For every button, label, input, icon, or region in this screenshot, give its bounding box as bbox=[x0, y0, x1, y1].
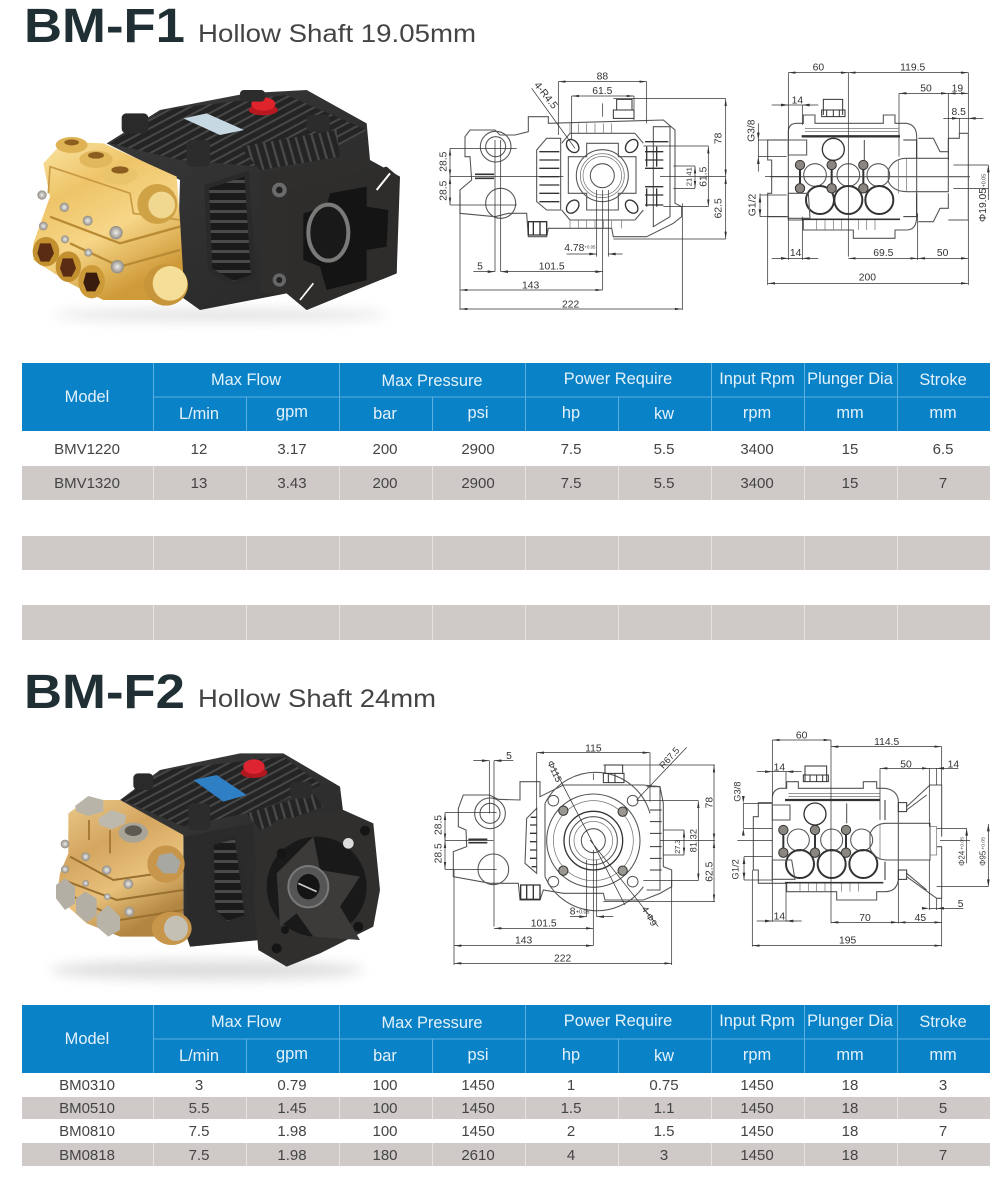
table rows: 1.5 bbox=[654, 1123, 674, 1140]
dimension lines and values: 5 bbox=[958, 899, 964, 910]
dimension lines and values: 62.5 bbox=[713, 198, 724, 218]
table rows: 5.5 bbox=[654, 441, 674, 458]
table rows: 7 bbox=[939, 475, 947, 492]
dimension lines and values: G1/2 bbox=[731, 859, 741, 879]
table rows: 18 bbox=[842, 1147, 858, 1164]
table rows: 5 bbox=[939, 1100, 947, 1117]
table header: Model bbox=[65, 388, 109, 406]
table rows: BM0818 bbox=[59, 1147, 115, 1164]
table header: mm bbox=[836, 404, 864, 422]
table rows: 3.17 bbox=[277, 441, 307, 458]
table: BM-F1 specifications bbox=[22, 363, 990, 640]
table rows: 1450 bbox=[740, 1077, 774, 1094]
table rows: 1.1 bbox=[654, 1100, 674, 1117]
dimension lines and values: 5 bbox=[506, 751, 512, 762]
dimension lines and values: 28.5 bbox=[439, 180, 450, 201]
table rows: 6.5 bbox=[933, 441, 953, 458]
table rows: 0.79 bbox=[277, 1077, 307, 1094]
table header: L/min bbox=[179, 405, 219, 423]
table rows: 1.5 bbox=[561, 1100, 581, 1117]
table header: Plunger Dia bbox=[807, 1012, 894, 1030]
dimension lines and values: +0.05 bbox=[981, 837, 987, 850]
dimension lines and values: 60 bbox=[813, 63, 824, 74]
table rows: 0.75 bbox=[649, 1077, 679, 1094]
drawing outline bbox=[453, 765, 672, 911]
dimension lines and values: R67.5 bbox=[657, 745, 681, 771]
dimension lines and values: 8 bbox=[570, 906, 576, 917]
dimension lines and values: 114.5 bbox=[874, 737, 899, 748]
table rows: 1 bbox=[567, 1077, 575, 1094]
dimension lines and values: 5 bbox=[477, 261, 483, 272]
table header: bar bbox=[373, 1047, 397, 1065]
dimension lines and values: Φ115 bbox=[545, 759, 564, 784]
dimension lines and values: 45 bbox=[915, 913, 926, 924]
table rows: 1450 bbox=[461, 1077, 495, 1094]
table rows: 200 bbox=[372, 441, 398, 458]
dimension lines and values: Φ95 bbox=[978, 850, 987, 866]
table rows: 200 bbox=[372, 475, 398, 492]
dimension lines and values: 61.5 bbox=[699, 166, 710, 187]
table rows: 1450 bbox=[740, 1123, 774, 1140]
table header: Max Pressure bbox=[381, 1014, 483, 1032]
dimension lines and values: 50 bbox=[920, 83, 932, 94]
table header: gpm bbox=[276, 1045, 308, 1063]
table header: L/min bbox=[179, 1047, 219, 1065]
table rows: 2900 bbox=[461, 475, 495, 492]
dimension lines and values: 70 bbox=[859, 913, 871, 924]
table rows: 7.5 bbox=[189, 1123, 209, 1140]
dimension lines and values bbox=[747, 63, 990, 285]
table header bbox=[22, 1005, 990, 1073]
icon: BM-F1 pump photo bbox=[33, 90, 400, 321]
table rows: 1450 bbox=[740, 1147, 774, 1164]
icon: BM-F2 pump photo bbox=[50, 753, 380, 980]
dimension lines and values: 60 bbox=[796, 730, 808, 741]
dimension lines and values: +0.05 bbox=[981, 174, 987, 187]
table rows: 1450 bbox=[461, 1100, 495, 1117]
dimension lines and values: G3/8 bbox=[747, 119, 758, 142]
title: BM-F1: BM-F1 bbox=[24, 0, 185, 53]
table header: kw bbox=[654, 405, 674, 423]
dimension lines and values: 78 bbox=[704, 797, 715, 808]
dimension lines and values: 14 bbox=[774, 763, 785, 774]
dimension lines and values bbox=[434, 743, 715, 965]
table rows: 12 bbox=[191, 441, 207, 458]
table rows: 100 bbox=[372, 1077, 398, 1094]
dimension lines and values: 50 bbox=[900, 760, 912, 771]
table rows: 1.98 bbox=[277, 1123, 307, 1140]
dimension lines and values: Φ24 bbox=[957, 850, 966, 866]
table rows: BMV1220 bbox=[54, 441, 120, 458]
drawing outline bbox=[460, 99, 682, 237]
drawing outline bbox=[753, 766, 942, 900]
dimension lines and values: 81.32 bbox=[689, 829, 699, 852]
drawing outline bbox=[768, 99, 970, 238]
dimension lines and values: 143 bbox=[515, 936, 533, 947]
diagram: BM-F2 side view with dimensions bbox=[731, 730, 990, 947]
dimension lines and values: 119.5 bbox=[900, 63, 925, 74]
dimension lines and values: 115 bbox=[585, 743, 602, 754]
dimension lines and values: 69.5 bbox=[873, 248, 894, 259]
title: BM-F2: Hollow Shaft 24mm bbox=[198, 685, 436, 713]
dimension lines and values: +0.05 bbox=[959, 837, 965, 850]
dimension lines and values: 14 bbox=[790, 248, 802, 259]
table rows: BM0810 bbox=[59, 1123, 115, 1140]
dimension lines and values bbox=[439, 71, 726, 310]
dimension lines and values: 200 bbox=[859, 273, 876, 284]
table rows: 100 bbox=[372, 1100, 398, 1117]
table header: Max Flow bbox=[211, 1013, 281, 1031]
table rows: 100 bbox=[372, 1123, 398, 1140]
table rows: BM0310 bbox=[59, 1077, 115, 1094]
table rows: 1450 bbox=[740, 1100, 774, 1117]
table rows: 13 bbox=[191, 475, 207, 492]
diagram: BM-F2 front view with dimensions bbox=[434, 743, 715, 965]
table rows: 7.5 bbox=[561, 475, 581, 492]
table header: gpm bbox=[276, 403, 308, 421]
table rows: 1.45 bbox=[277, 1100, 307, 1117]
dimension lines and values: 88 bbox=[597, 71, 608, 82]
dimension lines and values: 50 bbox=[937, 248, 949, 259]
dimension lines and values: 4-R4.5 bbox=[531, 80, 559, 112]
table header: hp bbox=[562, 1046, 580, 1064]
table header: Model bbox=[65, 1030, 109, 1048]
table header: Max Pressure bbox=[381, 372, 483, 390]
dimension lines and values: 78 bbox=[713, 132, 724, 144]
table rows: 1.98 bbox=[277, 1147, 307, 1164]
table header: bar bbox=[373, 405, 397, 423]
table header: rpm bbox=[743, 1046, 771, 1064]
table rows: 7 bbox=[939, 1147, 947, 1164]
diagram: BM-F1 front view with dimensions bbox=[439, 71, 726, 310]
dimension lines and values: 21.41 bbox=[685, 167, 694, 186]
table rows: 7.5 bbox=[561, 441, 581, 458]
table header: Power Require bbox=[564, 370, 672, 388]
dimension lines and values: 62.5 bbox=[704, 861, 715, 882]
dimension lines and values: G3/8 bbox=[733, 782, 743, 802]
table header: hp bbox=[562, 404, 580, 422]
table rows: 3 bbox=[939, 1077, 947, 1094]
dimension lines and values: 14 bbox=[774, 912, 785, 923]
dimension lines and values: 222 bbox=[562, 299, 580, 310]
table rows: 4 bbox=[567, 1147, 575, 1164]
dimension lines and values: 28.5 bbox=[434, 815, 445, 835]
table rows: 5.5 bbox=[654, 475, 674, 492]
table rows: 2 bbox=[567, 1123, 575, 1140]
dimension lines and values: 14 bbox=[948, 760, 959, 771]
table rows bbox=[22, 441, 990, 640]
dimension lines and values: 143 bbox=[522, 280, 540, 291]
dimension lines and values bbox=[731, 730, 990, 947]
table header: Stroke bbox=[919, 371, 967, 389]
table rows: 2900 bbox=[461, 441, 495, 458]
table header: psi bbox=[468, 1046, 488, 1064]
table rows: 180 bbox=[372, 1147, 398, 1164]
title: BM-F2 bbox=[24, 665, 436, 719]
table header: Stroke bbox=[919, 1013, 967, 1031]
table header: Power Require bbox=[564, 1012, 672, 1030]
dimension lines and values: 61.5 bbox=[592, 86, 613, 97]
dimension lines and values: 19 bbox=[952, 83, 963, 94]
table: BM-F2 specifications bbox=[22, 1005, 990, 1166]
table rows: 3.43 bbox=[277, 475, 307, 492]
dimension lines and values: 28.5 bbox=[434, 843, 445, 863]
table rows: BM0510 bbox=[59, 1100, 115, 1117]
table header: kw bbox=[654, 1047, 674, 1065]
dimension lines and values: 195 bbox=[839, 936, 857, 947]
table header: Input Rpm bbox=[719, 370, 795, 388]
table rows: 3400 bbox=[740, 475, 774, 492]
table rows: 1450 bbox=[461, 1123, 495, 1140]
diagram: BM-F1 side view with dimensions bbox=[747, 63, 990, 285]
dimension lines and values: 101.5 bbox=[539, 261, 565, 272]
table header: mm bbox=[836, 1046, 864, 1064]
dimension lines and values: 101.5 bbox=[531, 918, 557, 929]
table rows: 15 bbox=[842, 475, 858, 492]
table header: rpm bbox=[743, 404, 771, 422]
table rows: 15 bbox=[842, 441, 858, 458]
table rows: BMV1320 bbox=[54, 475, 120, 492]
table rows: 7.5 bbox=[189, 1147, 209, 1164]
dimension lines and values: 8.5 bbox=[951, 107, 966, 118]
table header: Plunger Dia bbox=[807, 370, 894, 388]
table rows: 18 bbox=[842, 1100, 858, 1117]
dimension lines and values: 4-Φ9 bbox=[640, 905, 659, 928]
table header: Max Flow bbox=[211, 371, 281, 389]
dimension lines and values: +0.05 bbox=[585, 245, 596, 250]
table header: mm bbox=[929, 1046, 957, 1064]
title: BM-F2: BM-F2 bbox=[24, 665, 185, 719]
dimension lines and values: G1/2 bbox=[747, 194, 758, 216]
dimension lines and values: +0.05 bbox=[576, 909, 589, 915]
dimension lines and values: 4.78 bbox=[564, 243, 585, 254]
dimension lines and values: Φ19.05 bbox=[978, 188, 989, 222]
table rows: 5.5 bbox=[189, 1100, 209, 1117]
table rows: 3 bbox=[660, 1147, 668, 1164]
title: BM-F1: Hollow Shaft 19.05mm bbox=[198, 20, 476, 48]
dimension lines and values: 222 bbox=[554, 953, 572, 964]
table header: psi bbox=[468, 404, 488, 422]
table rows: 18 bbox=[842, 1077, 858, 1094]
dimension lines and values: 28.5 bbox=[439, 151, 450, 172]
table rows bbox=[22, 1077, 990, 1166]
table rows: 7 bbox=[939, 1123, 947, 1140]
title: BM-F1 bbox=[24, 0, 476, 53]
table rows: 2610 bbox=[461, 1147, 495, 1164]
table header bbox=[22, 363, 990, 431]
dimension lines and values: 14 bbox=[792, 95, 803, 106]
table rows: 18 bbox=[842, 1123, 858, 1140]
dimension lines and values: 27.3 bbox=[673, 840, 682, 854]
table header: Input Rpm bbox=[719, 1012, 795, 1030]
table rows: 3400 bbox=[740, 441, 774, 458]
table header: mm bbox=[929, 404, 957, 422]
table rows: 3 bbox=[195, 1077, 203, 1094]
